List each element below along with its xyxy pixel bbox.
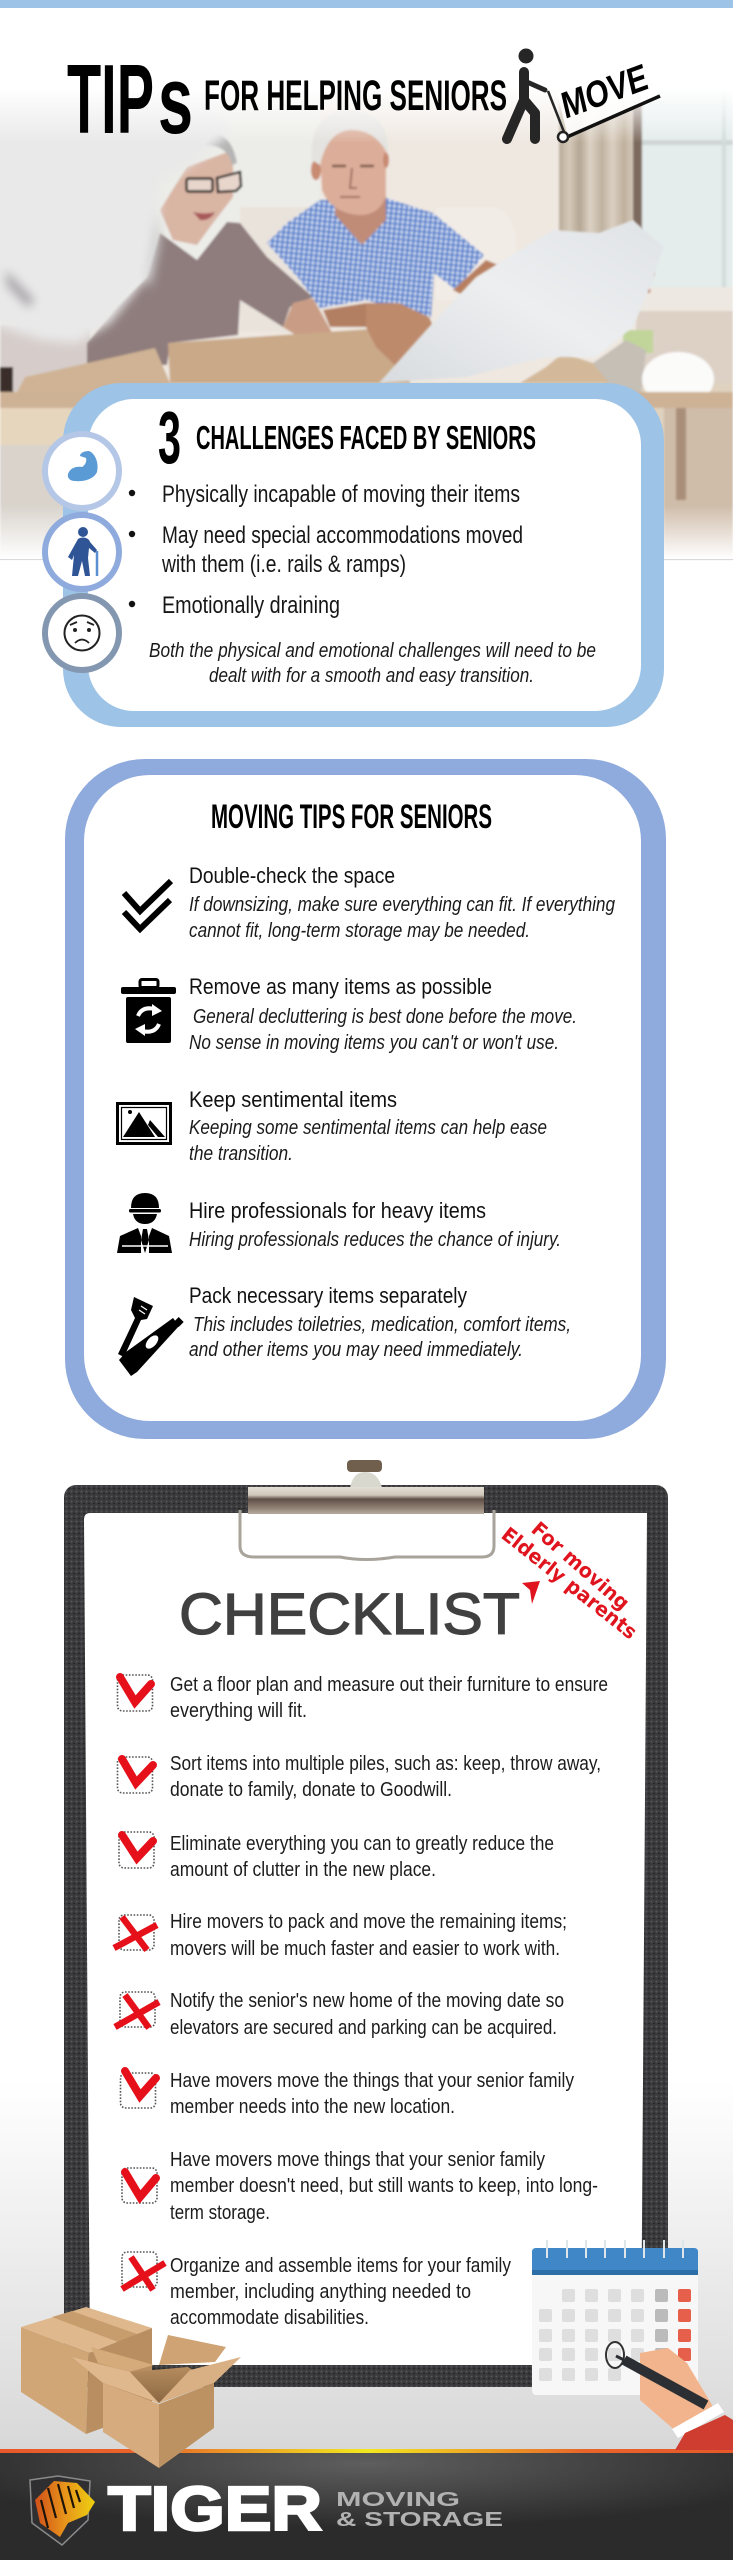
note: for moving elderly parents: Elderly parents xyxy=(497,1522,642,1644)
tip: pack necessary items: and other items you may need immediately. xyxy=(189,1338,523,1361)
wall xyxy=(0,85,733,559)
checklist item 6: member needs into the new location. xyxy=(170,2095,455,2118)
tip: hire professionals: Hire professionals for heavy items xyxy=(189,1198,486,1223)
tip: sentimental items: Keep sentimental items xyxy=(189,1087,397,1112)
checklist item 2: donate to family, donate to Goodwill. xyxy=(170,1778,452,1801)
logo: tiger moving and storage: TIGER xyxy=(108,2475,322,2544)
checklist item 8: accommodate disabilities. xyxy=(170,2306,369,2329)
lower surroundings xyxy=(0,383,733,559)
calendar cells xyxy=(539,2289,691,2381)
note: Both the physical and emotional challenges will need to be xyxy=(149,639,596,662)
icon: tiger shield xyxy=(30,2476,95,2545)
paper xyxy=(84,1513,647,2365)
logo: tiger moving and storage: MOVING xyxy=(336,2489,460,2511)
checklist item 6 xyxy=(120,2069,575,2118)
checklist item 3: amount of clutter in the new place. xyxy=(170,1858,436,1881)
top bar xyxy=(0,0,733,8)
tip: sentimental items xyxy=(189,1087,547,1165)
checklist item 5: elevators are secured and parking can be acquired. xyxy=(170,2016,557,2039)
checklist item 3 xyxy=(119,1832,554,1881)
tip: remove items xyxy=(189,974,577,1054)
checklist item 3: Eliminate everything you can to greatly reduce the xyxy=(170,1832,554,1855)
heading: 3 challenges xyxy=(158,396,536,479)
icon: senior with cane xyxy=(45,515,119,589)
checklist item 5: Notify the senior's new home of the moving date so xyxy=(170,1989,564,2012)
title xyxy=(67,44,507,154)
checklist item 4 xyxy=(114,1910,567,1960)
tip: sentimental items: Keeping some sentimental items can help ease xyxy=(189,1116,547,1139)
word: MOVE: MOVE xyxy=(557,55,651,127)
note: dealt with for a smooth and easy transition. xyxy=(209,664,534,687)
note: for moving elderly parents: For moving xyxy=(527,1517,635,1615)
checklist item 8: member, including anything needed to xyxy=(170,2280,471,2303)
man xyxy=(267,197,484,317)
checklist item 7: term storage. xyxy=(170,2201,270,2224)
checklist item 8: Organize and assemble items for your family xyxy=(170,2254,512,2277)
tip: remove items: Remove as many items as possible xyxy=(189,974,492,999)
checklist item 1 xyxy=(118,1673,608,1722)
title: FOR HELPING SENIORS xyxy=(204,72,507,120)
checklist item 5 xyxy=(115,1989,564,2039)
bullet list: with them (i.e. rails & ramps) xyxy=(161,551,406,578)
tip: double-check the space xyxy=(189,863,615,942)
heading: 3 challenges: 3 xyxy=(158,396,181,479)
hand with pen xyxy=(640,2348,715,2433)
icon: construction worker xyxy=(117,1193,172,1253)
photo: seniors packing a box xyxy=(0,60,733,560)
bullet list: Emotionally draining xyxy=(162,592,340,619)
checklist item 2: Sort items into multiple piles, such as: keep, throw away, xyxy=(170,1752,601,1775)
tip: remove items: No sense in moving items you can't or won't use. xyxy=(189,1031,559,1054)
checklist item 4: movers will be much faster and easier to work with. xyxy=(170,1937,560,1960)
heading: checklist: CHECKLIST xyxy=(179,1582,520,1647)
checklist item 8 xyxy=(122,2252,512,2329)
icon: toothbrush and toothpaste xyxy=(118,1297,184,1376)
clipboard xyxy=(64,1460,668,2387)
heading: moving tips: MOVING TIPS FOR SENIORS xyxy=(211,798,492,836)
checklist item 7: Have movers move things that your senior family xyxy=(170,2148,546,2171)
logo: tiger moving and storage xyxy=(30,2475,503,2545)
panel: 3 challenges xyxy=(45,383,664,727)
checklist item 7 xyxy=(122,2148,598,2224)
title: s xyxy=(158,47,193,154)
bullet list: Physically incapable of moving their items xyxy=(162,481,520,508)
note xyxy=(149,639,596,687)
tip: double-check the space: cannot fit, long-term storage may be needed. xyxy=(189,919,530,942)
icon: calendar and hand xyxy=(532,2240,733,2450)
panel: moving tips xyxy=(65,759,666,1439)
tip: double-check the space: Double-check the space xyxy=(189,863,395,888)
icon: cardboard boxes xyxy=(21,2307,241,2468)
bullet list xyxy=(129,481,523,619)
icon: double check xyxy=(124,881,171,929)
checklist item 6: Have movers move the things that your senior family xyxy=(170,2069,575,2092)
checklist item 2 xyxy=(118,1752,601,1801)
icon: framed picture xyxy=(118,1104,170,1144)
icon: person pushing hand truck xyxy=(507,48,660,142)
logo: tiger moving and storage: & STORAGE xyxy=(336,2509,503,2531)
tip: pack necessary items xyxy=(189,1283,571,1361)
tip: sentimental items: the transition. xyxy=(189,1142,293,1165)
icon: sad face xyxy=(45,596,119,670)
box xyxy=(168,327,410,383)
tip: hire professionals: Hiring professionals reduces the chance of injury. xyxy=(189,1228,561,1251)
title: TIP xyxy=(67,44,154,154)
tip: pack necessary items: This includes toiletries, medication, comfort items, xyxy=(193,1313,571,1336)
checklist item 7: member doesn't need, but still wants to keep, into long- xyxy=(170,2174,598,2197)
bullet list: May need special accommodations moved xyxy=(162,522,523,549)
footer band xyxy=(0,2449,733,2560)
bubble wrap left xyxy=(0,70,230,343)
woman xyxy=(87,222,313,365)
tip: pack necessary items: Pack necessary items separately xyxy=(189,1283,467,1308)
clip xyxy=(240,1460,494,1560)
icon: flexed arm xyxy=(45,434,119,508)
icon: trash can xyxy=(121,980,176,1043)
checklist item 4: Hire movers to pack and move the remaining items; xyxy=(170,1910,567,1933)
checklist item 1: everything will fit. xyxy=(170,1699,307,1722)
checklist item 1: Get a floor plan and measure out their furniture to ensure xyxy=(170,1673,608,1696)
tip: double-check the space: If downsizing, make sure everything can fit. If everything xyxy=(189,893,615,916)
tip: hire professionals xyxy=(189,1198,561,1251)
tip: remove items: General decluttering is best done before the move. xyxy=(193,1005,577,1028)
man hand xyxy=(366,303,443,373)
bubble wrap right xyxy=(379,220,663,383)
